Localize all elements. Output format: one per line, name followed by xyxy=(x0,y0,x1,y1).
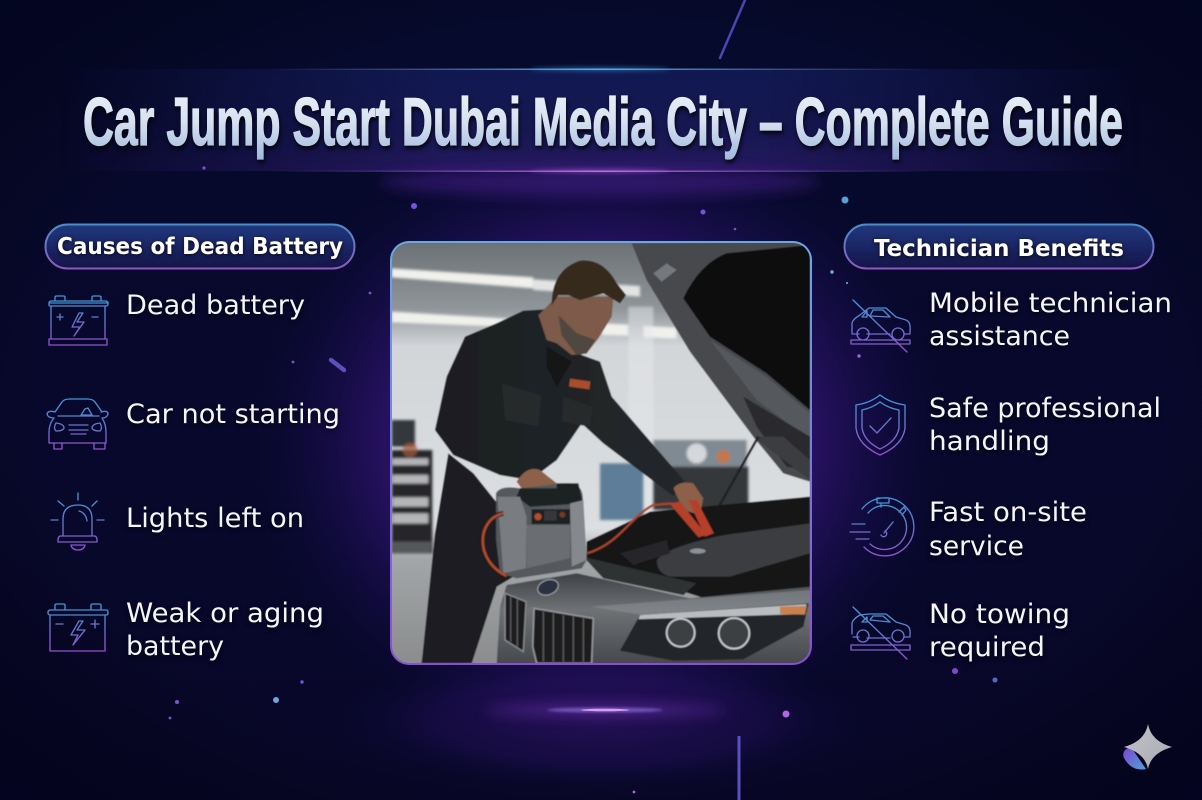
icon: weak battery xyxy=(48,604,108,651)
text: safe professional handling xyxy=(929,393,1161,457)
icon: mobile car xyxy=(851,300,910,352)
text: safe professional handling: Safe professional xyxy=(929,393,1161,424)
text: fast on-site service xyxy=(929,497,1087,562)
text: no towing required: No towing xyxy=(929,599,1070,630)
text: mobile technician assistance: Mobile technician xyxy=(929,288,1172,319)
ceiling lights xyxy=(392,268,677,339)
jump pack xyxy=(496,483,587,578)
icon: no towing xyxy=(851,607,910,659)
clamp xyxy=(669,500,714,537)
text: weak or aging battery xyxy=(126,598,324,662)
bottom glow xyxy=(485,705,725,715)
text: no towing required: required xyxy=(929,632,1045,663)
head xyxy=(538,297,613,355)
text: lights left on: Lights left on xyxy=(126,503,304,534)
panel: causes heading xyxy=(46,224,354,268)
photo: technician jump-starting car xyxy=(390,240,812,665)
text: weak or aging battery: battery xyxy=(126,631,224,662)
panel: benefits heading: Technician Benefits xyxy=(874,236,1124,262)
text: car not starting: Car not starting xyxy=(126,399,340,430)
hands xyxy=(516,468,558,489)
icon: sparkle watermark xyxy=(1123,724,1172,770)
panel: benefits heading xyxy=(844,224,1154,268)
panel: benefits list xyxy=(850,288,1172,663)
icon: alarm light xyxy=(51,493,104,550)
badge xyxy=(569,379,590,389)
cables xyxy=(495,510,508,576)
man legs xyxy=(422,453,513,663)
text: mobile technician assistance: assistance xyxy=(929,321,1070,352)
car body xyxy=(497,573,810,665)
headlight xyxy=(620,603,808,661)
icon: shield xyxy=(856,395,905,455)
particles xyxy=(169,0,998,800)
text: mobile technician assistance xyxy=(929,288,1172,352)
panel: causes heading: Causes of Dead Battery xyxy=(57,234,343,260)
hood xyxy=(632,242,810,482)
text: fast on-site service: Fast on-site xyxy=(929,497,1087,528)
engine bay xyxy=(587,497,810,600)
text: weak or aging battery: Weak or aging xyxy=(126,598,324,629)
grille xyxy=(505,593,526,652)
background equipment xyxy=(392,420,748,553)
text: dead battery: Dead battery xyxy=(126,290,305,321)
man torso and arms xyxy=(435,309,685,496)
text: no towing required xyxy=(929,599,1070,663)
icon: dead battery xyxy=(49,296,108,345)
text: fast on-site service: service xyxy=(929,531,1024,562)
panel: causes list xyxy=(47,290,340,662)
title band xyxy=(60,67,1140,196)
icon: stopwatch xyxy=(850,498,914,556)
text: safe professional handling: handling xyxy=(929,426,1050,457)
icon: car front xyxy=(47,399,108,449)
